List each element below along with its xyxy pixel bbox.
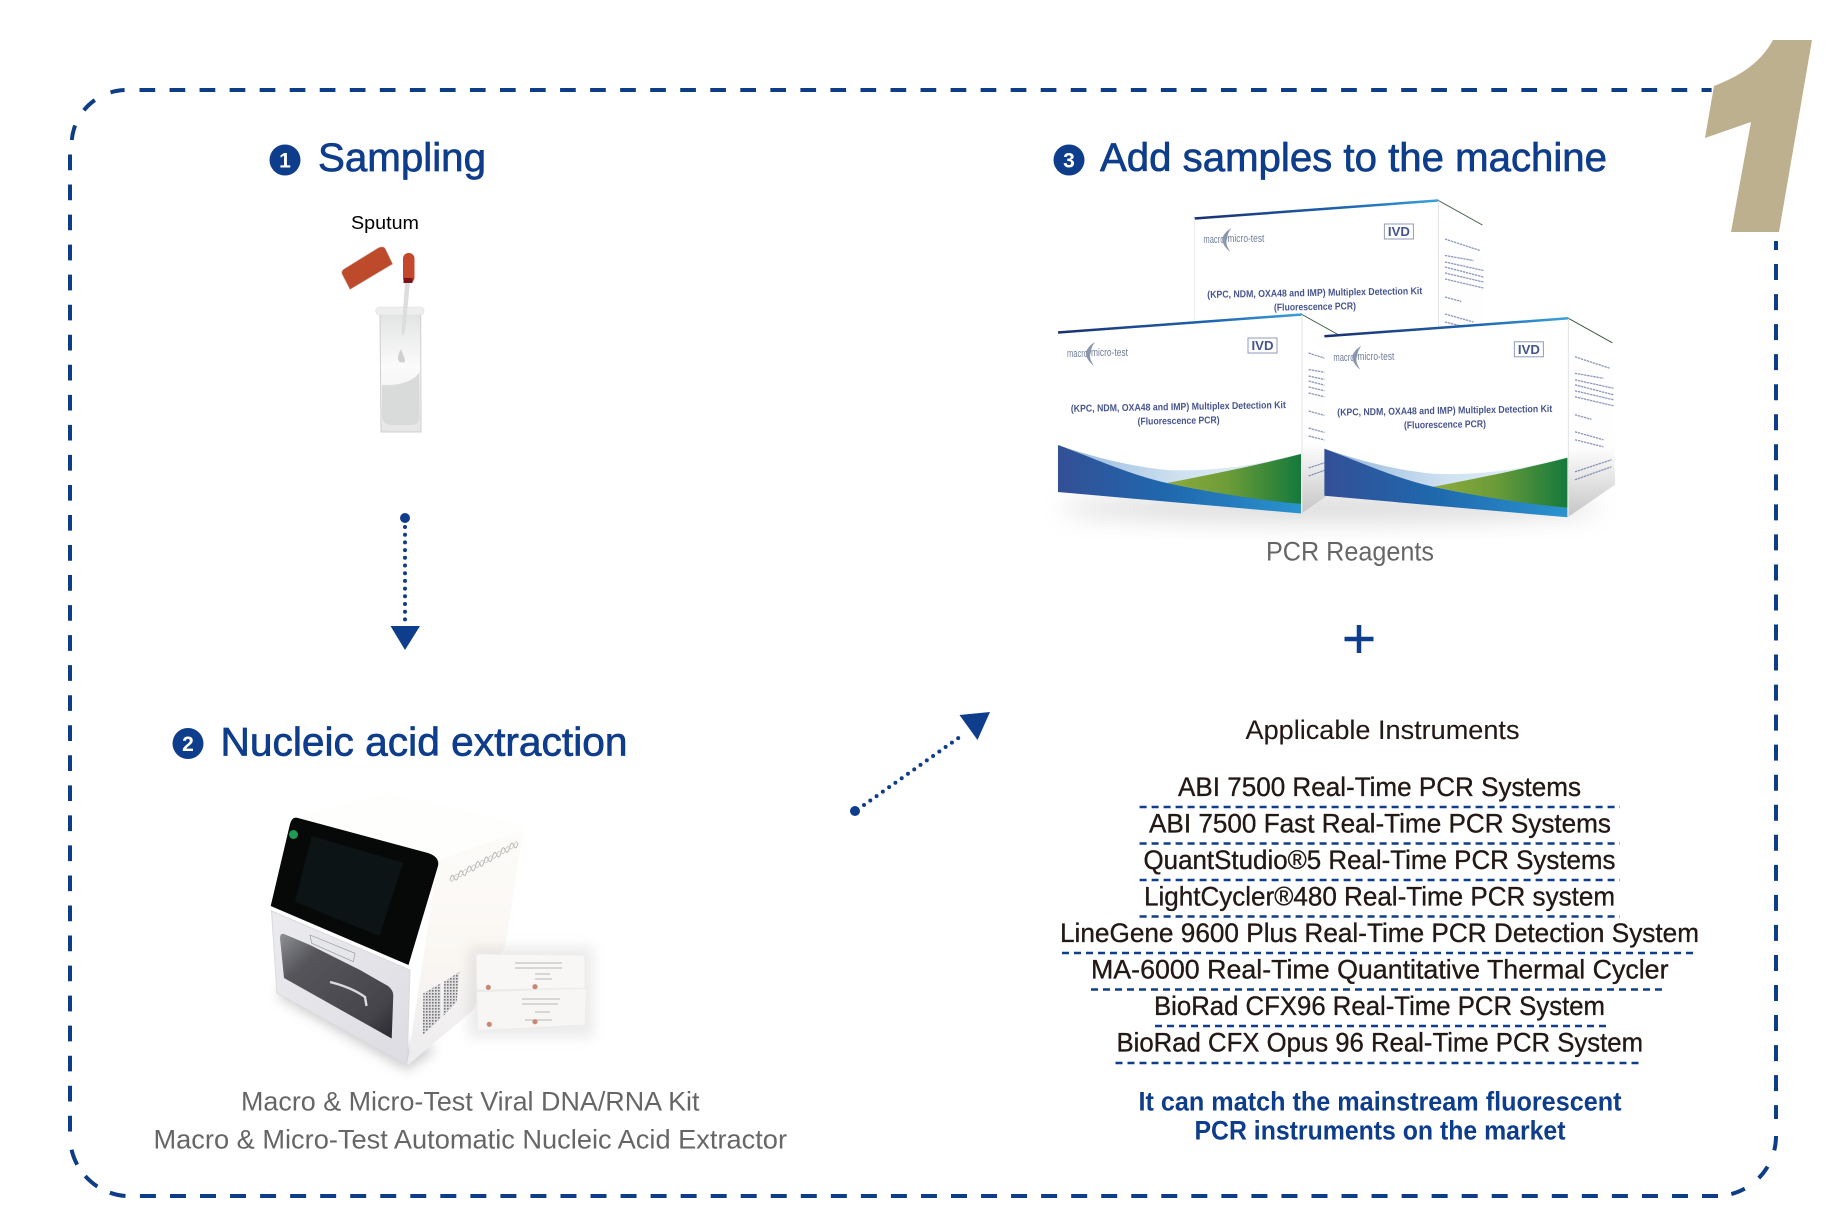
extractor machine and kit — [271, 793, 594, 1070]
box: front left: micro-test — [1091, 347, 1128, 359]
plus sign — [1344, 625, 1374, 653]
PCR reagent boxes — [1058, 200, 1615, 522]
box: front right: (KPC, NDM, OXA48 and IMP) Multiplex Detection Kit — [1337, 404, 1553, 419]
reagents caption: PCR Reagents — [1266, 537, 1434, 567]
box: back: (KPC, NDM, OXA48 and IMP) Multiplex Detection Kit — [1207, 286, 1423, 301]
instrument list: ABI 7500 Real-Time PCR Systems — [1178, 772, 1581, 802]
arrow: extraction to machine — [850, 712, 990, 816]
box: front left: IVD — [1252, 339, 1274, 353]
instrument list: ABI 7500 Fast Real-Time PCR Systems — [1149, 808, 1611, 838]
compatibility note: PCR instruments on the market — [1194, 1116, 1566, 1146]
extraction caption: Macro & Micro-Test Viral DNA/RNA Kit — [241, 1086, 700, 1116]
box: back — [1194, 200, 1485, 399]
icon: sputum tube with dropper — [342, 247, 424, 432]
box: front right — [1324, 318, 1615, 517]
machine body — [293, 793, 523, 1066]
box: back: macro — [1203, 234, 1224, 246]
instrument list: LightCycler®480 Real-Time PCR system — [1144, 882, 1615, 912]
step 3 heading: Add samples to the machine — [1100, 136, 1607, 180]
big step number 1 — [1705, 40, 1812, 232]
arrow: sampling to extraction — [390, 513, 420, 650]
box: front left — [1058, 314, 1349, 514]
instrument list — [1060, 772, 1699, 1063]
instrument list: BioRad CFX Opus 96 Real-Time PCR System — [1116, 1028, 1643, 1058]
instrument list: MA-6000 Real-Time Quantitative Thermal Cycler — [1091, 954, 1669, 984]
step 1 heading: 1 — [279, 150, 291, 172]
door window — [280, 934, 393, 1038]
box: back: IVD — [1388, 225, 1410, 239]
step 3 heading: 3 — [1063, 150, 1075, 172]
box: front right: micro-test — [1357, 351, 1394, 363]
sputum label: Sputum — [351, 213, 419, 233]
instrument list: QuantStudio®5 Real-Time PCR Systems — [1144, 845, 1616, 875]
instrument list: LineGene 9600 Plus Real-Time PCR Detection System — [1060, 918, 1699, 948]
helix logo — [450, 843, 518, 880]
box: front left: macro — [1067, 348, 1088, 360]
box: front left: (Fluorescence PCR) — [1137, 415, 1220, 428]
step 1 heading: Sampling — [318, 136, 486, 180]
box: back: micro-test — [1227, 233, 1264, 245]
extraction caption — [154, 1086, 787, 1154]
compatibility note — [1138, 1087, 1622, 1146]
applicable instruments heading: Applicable Instruments — [1246, 715, 1520, 745]
kit trays — [468, 946, 594, 1038]
step 2 heading: 2 — [182, 733, 194, 756]
box: front left: (KPC, NDM, OXA48 and IMP) Multiplex Detection Kit — [1071, 400, 1286, 415]
box: front right: macro — [1333, 352, 1354, 364]
box: front right: (Fluorescence PCR) — [1404, 419, 1486, 432]
box: front right: IVD — [1518, 343, 1540, 357]
step 2 heading: Nucleic acid extraction — [220, 720, 628, 764]
box: back: (Fluorescence PCR) — [1274, 301, 1356, 314]
instrument list: BioRad CFX96 Real-Time PCR System — [1154, 991, 1605, 1021]
control panel — [271, 818, 438, 965]
extraction caption: Macro & Micro-Test Automatic Nucleic Acid Extractor — [154, 1124, 787, 1154]
compatibility note: It can match the mainstream fluorescent — [1138, 1087, 1622, 1117]
